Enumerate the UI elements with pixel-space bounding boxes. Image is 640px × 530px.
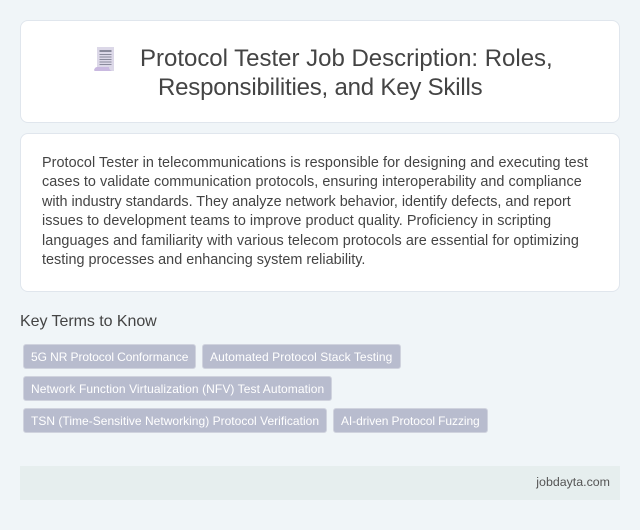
tag <box>333 408 488 433</box>
description text: cases to validate communication protocols, ensuring interoperability and compliance <box>42 174 582 190</box>
tag: 5G NR Protocol Conformance <box>31 350 188 364</box>
tag: TSN (Time-Sensitive Networking) Protocol Verification <box>31 414 319 428</box>
tag: Network Function Virtualization (NFV) Test Automation <box>31 382 324 396</box>
title: Protocol Tester Job Description: Roles, <box>140 45 553 72</box>
description text: Protocol Tester in telecommunications is responsible for designing and executing test <box>42 155 588 171</box>
tag <box>23 344 196 369</box>
icon: document scroll <box>94 47 114 71</box>
header card <box>20 20 620 123</box>
title: Responsibilities, and Key Skills <box>158 74 482 101</box>
tag <box>23 376 332 401</box>
footer bar <box>20 466 620 500</box>
description text: languages and familiarity with various telecom protocols are essential for optimizing <box>42 233 579 249</box>
description text: with industry standards. They analyze network behavior, identify defects, and report <box>42 194 571 210</box>
heading: key terms: Key Terms to Know <box>20 313 157 330</box>
tag <box>23 408 327 433</box>
description text: testing processes and enhancing system reliability. <box>42 252 365 268</box>
description card <box>20 133 620 292</box>
description text: issues to development teams to improve product quality. Proficiency in scripting <box>42 213 551 229</box>
tag: AI-driven Protocol Fuzzing <box>341 414 480 428</box>
tag <box>202 344 401 369</box>
title <box>140 45 553 101</box>
tags <box>23 344 488 433</box>
description text <box>42 155 588 268</box>
tag: Automated Protocol Stack Testing <box>210 350 392 364</box>
footer text: jobdayta.com <box>536 475 610 489</box>
